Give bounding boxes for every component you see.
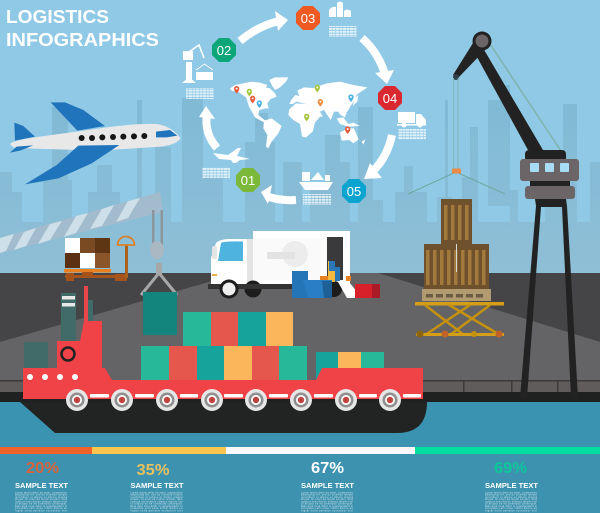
stat: 35%: adipiscing elit, sed do eiusmod tempor: [130, 494, 183, 497]
stat: 69%: incididunt ut labore et dolore magna: [485, 496, 538, 499]
location pins: [234, 85, 354, 134]
step 03 badge: [296, 6, 320, 30]
stat: 69%: voluptate velit esse cillum dolore eu: [485, 507, 538, 510]
stat: 67%: incididunt ut labore et dolore magna: [301, 496, 354, 499]
stat: 20%: 20%: [26, 460, 59, 477]
stat: 67%: voluptate velit esse cillum dolore eu: [301, 507, 354, 510]
stat: 20%: SAMPLE TEXT: [15, 481, 69, 490]
circular arrows: [199, 11, 394, 204]
step 01 badge: 01: [241, 173, 255, 188]
water: [0, 402, 600, 447]
cabin: [57, 321, 102, 368]
funnel and mast: [24, 286, 93, 368]
stat: 35%: Duis aute irure dolor in reprehenderit in: [130, 505, 183, 508]
stat: 20%: Lorem ipsum dolor sit amet, consectetur: [15, 492, 67, 494]
stat: 67%: [301, 460, 355, 512]
delivery truck with cargo: [208, 231, 380, 298]
stat: 69%: SAMPLE TEXT: [485, 481, 539, 490]
stat: 20%: Duis aute irure dolor in reprehenderit in: [15, 505, 68, 508]
stat: 67%: Lorem ipsum dolor sit amet, consectetur: [301, 492, 353, 494]
bottom stats panel background: [0, 447, 600, 513]
icon: bar chart: [329, 2, 351, 17]
stat: 67%: ut aliquip ex ea commodo consequat.: [301, 502, 353, 506]
hull: [20, 402, 427, 433]
icon: port crane and container: [182, 45, 213, 83]
stat: 69%: [485, 460, 539, 512]
step 05 badge: 05: [347, 184, 361, 199]
stat: 67%: 67%: [311, 460, 344, 477]
stat: 67%: adipiscing elit, sed do eiusmod tempor: [301, 494, 353, 497]
stat: 35%: Lorem ipsum dolor sit amet, consectetur: [130, 492, 183, 494]
stat: 69%: 69%: [494, 460, 527, 477]
icon: delivery truck: [397, 112, 426, 128]
stat: 67%: fugiat nulla pariatur excepteur sint: [301, 509, 353, 512]
stat: 35%: aliqua. Ut enim ad minim veniam, quis: [130, 498, 183, 501]
stat: 69%: Lorem ipsum dolor sit amet, consectetur: [485, 492, 537, 494]
title: LOGISTICS: [6, 7, 109, 27]
cargo ship: [20, 286, 427, 433]
stat: 20%: ut aliquip ex ea commodo consequat.: [15, 502, 67, 506]
title: INFOGRAPHICS: [6, 30, 159, 50]
dock edge: [0, 380, 600, 402]
city skyline: [0, 85, 600, 277]
hull lights and dashes: [90, 394, 421, 398]
stat: 20%: adipiscing elit, sed do eiusmod tempor: [15, 494, 67, 497]
step 02 badge: 02: [217, 43, 231, 58]
airplane: [10, 102, 181, 184]
step 04 badge: 04: [383, 91, 397, 106]
stat: 35%: ut aliquip ex ea commodo consequat.: [130, 502, 183, 506]
stat: 20%: aliqua. Ut enim ad minim veniam, quis: [15, 498, 68, 501]
step 04 badge: [378, 86, 402, 110]
stat: 20%: voluptate velit esse cillum dolore eu: [15, 507, 68, 510]
step 02 badge: [212, 38, 236, 62]
stat: 20%: nostrud exercitation ullamco laboris nisi: [15, 500, 67, 503]
colored progress bar: [0, 447, 600, 454]
stat: 35%: fugiat nulla pariatur excepteur sint: [130, 509, 183, 512]
hook and hanging container: [141, 210, 177, 335]
stat: 20%: fugiat nulla pariatur excepteur sint: [15, 509, 67, 512]
icon: cargo ship: [299, 172, 333, 190]
stat: 69%: aliqua. Ut enim ad minim veniam, quis: [485, 498, 538, 501]
stat: 69%: Duis aute irure dolor in reprehenderit in: [485, 505, 538, 508]
pallet of boxes on hand truck: [64, 236, 134, 281]
tyre fenders: [66, 389, 401, 411]
striped dock crane boom: [0, 192, 163, 253]
stat: 67%: nostrud exercitation ullamco laboris nisi: [301, 500, 353, 503]
stat: 67%: SAMPLE TEXT: [301, 481, 355, 490]
step 05 badge: [342, 179, 366, 203]
text grid placeholders: [186, 26, 426, 205]
world map with pins: [230, 77, 367, 148]
step 03 badge: 03: [301, 11, 315, 26]
stat: 35%: [130, 462, 184, 512]
stat: 35%: incididunt ut labore et dolore magna: [130, 496, 183, 499]
stat: 69%: fugiat nulla pariatur excepteur sint: [485, 509, 537, 512]
stat: 67%: Duis aute irure dolor in reprehenderit in: [301, 505, 354, 508]
tall port crane: [408, 32, 579, 398]
stat: 20%: incididunt ut labore et dolore magna: [15, 496, 68, 499]
sky background: [0, 0, 600, 280]
containers: [141, 312, 384, 380]
stat: 69%: ut aliquip ex ea commodo consequat.: [485, 502, 537, 506]
icon: small plane: [213, 148, 250, 163]
stacked wooden crates on scissor lift: [415, 199, 504, 338]
stat: 35%: voluptate velit esse cillum dolore eu: [130, 507, 183, 510]
title: [6, 7, 159, 50]
stat: 35%: SAMPLE TEXT: [130, 481, 184, 490]
stat: 20%: [15, 460, 69, 512]
ground: [0, 273, 600, 381]
stat: 69%: adipiscing elit, sed do eiusmod tempor: [485, 494, 537, 497]
stat: 67%: aliqua. Ut enim ad minim veniam, quis: [301, 498, 354, 501]
stat: 35%: 35%: [136, 462, 170, 479]
stat: 69%: nostrud exercitation ullamco laboris nisi: [485, 500, 537, 503]
stat: 35%: nostrud exercitation ullamco laboris nisi: [130, 500, 183, 503]
step 01 badge: [236, 168, 260, 192]
